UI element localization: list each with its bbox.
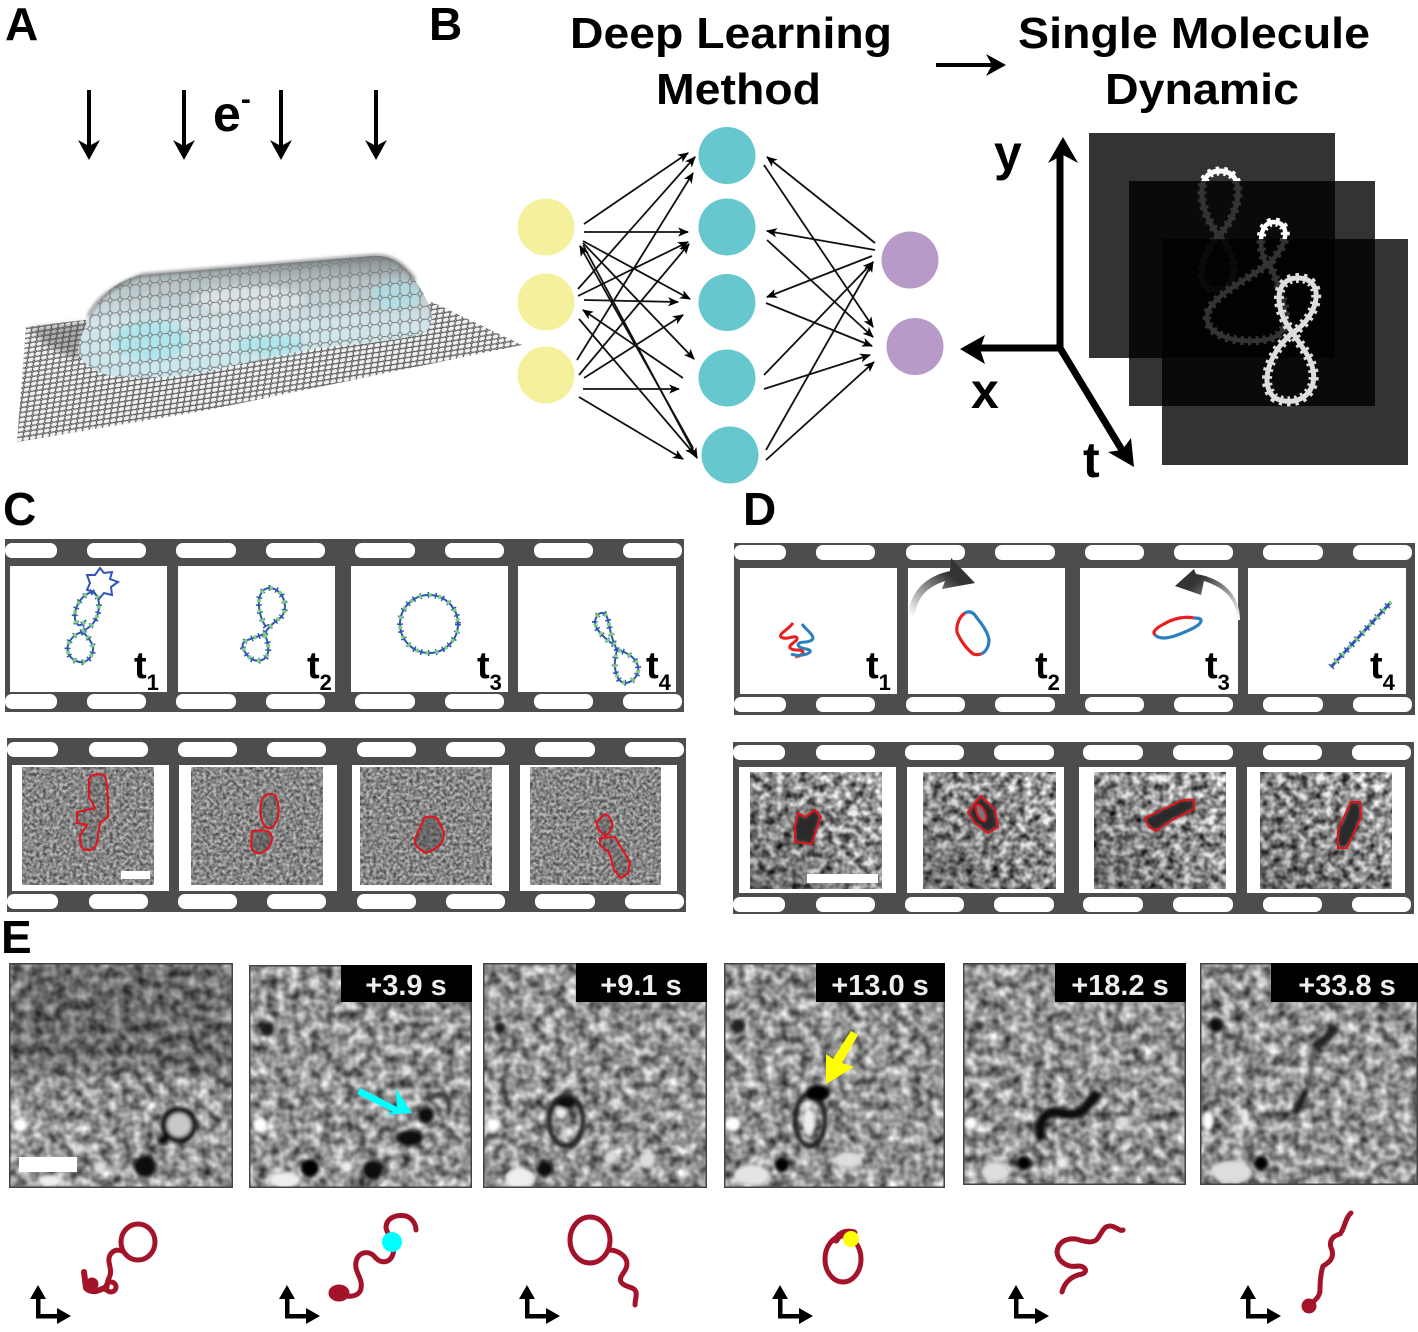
micrograph D t1 [750,772,882,889]
time tag +33.8 s: +33.8 s [1298,970,1396,1002]
panel C: schematic film strip [5,539,684,712]
heading: Deep Learning Method: Deep Learning [570,9,892,58]
panel E: micrograph frame 5 [963,963,1186,1185]
panel A: graphene sheet [17,302,522,442]
micrograph C t1 [22,767,154,885]
neural network input nodes [518,198,574,404]
time labels C: t [646,645,659,687]
time tag +13.0 s: +13.0 s [831,970,929,1002]
micrograph D t4 [1260,772,1392,889]
opened capsule D t2 [957,612,989,655]
axis label y: y [994,125,1022,181]
flattened capsule D t3 [1154,617,1201,638]
neural network connection arrows [577,153,875,460]
traced molecule 3 [570,1217,636,1305]
time labels C [134,645,672,695]
panel E: micrograph frame 3 [483,963,707,1188]
micrograph C t3 [360,767,492,885]
micrograph C t4 [530,767,661,885]
molecule frame C t3 [400,595,458,653]
time labels D: 1 [879,670,891,695]
micrograph D t3 [1094,772,1226,889]
panel E: micrograph frame 2 [249,963,472,1188]
panel A: electron beam arrows [78,90,387,160]
stacked time frames with figure-eight molecules [1089,133,1408,465]
heading: Single Molecule Dynamic [1018,9,1370,114]
cyan arrow [357,1088,412,1115]
time labels C: 2 [320,670,332,695]
time labels D: t [1205,645,1218,687]
time tag +13.0 s [816,963,945,1002]
arrow between headings [936,54,1006,76]
molecule frame C t1 [68,568,118,662]
time labels D: 2 [1048,670,1060,695]
traced molecule 6 [1304,1213,1351,1311]
time labels D: 4 [1383,670,1396,695]
panel D: micrograph film strip [733,742,1414,914]
panel E: micrograph frame 4 [724,963,945,1188]
xyt coordinate axes [960,137,1134,467]
traced molecule 2 with cyan marker [331,1216,416,1299]
time tag +3.9 s [341,963,472,1002]
time labels D: t [866,645,879,687]
heading: Single Molecule Dynamic: Single Molecule [1018,9,1370,58]
panel A: liquid pocket dome [78,256,432,378]
panel C: micrograph film strip [7,738,686,912]
time tag +9.1 s [576,963,707,1002]
axis label x: x [971,363,999,419]
panel E: micrograph frame 1 [9,963,233,1188]
panel D: schematic film strip [734,543,1415,715]
molecule frame C t2 [242,588,285,661]
panel label E: E [1,911,32,963]
time labels C: 4 [659,670,672,695]
rotation arrow right [908,558,975,620]
traced molecule 5 [1057,1226,1123,1292]
neural network output nodes [882,232,944,375]
time tag +18.2 s [1055,963,1186,1002]
straight DNA D t4 [1331,602,1391,667]
traced molecule 4 with yellow marker [825,1231,861,1282]
neural network hidden nodes [698,127,758,484]
heading: Deep Learning Method [570,9,892,114]
panel label C: C [3,483,36,535]
electron label: e [213,86,241,142]
yellow arrow [826,1031,858,1084]
scale bar E [19,1157,77,1172]
heading: Deep Learning Method: Method [656,65,821,114]
panel E: micrograph frame 6 [1200,963,1418,1185]
heading: Single Molecule Dynamic: Dynamic [1105,65,1299,114]
time labels D [866,645,1396,695]
tangled strands D t1 [780,623,813,658]
time labels C: t [477,645,490,687]
time labels C: t [307,645,320,687]
small xy axes row [30,1285,1281,1324]
time labels C: 1 [147,670,159,695]
micrograph D t2 [923,772,1056,889]
electron label: - [241,83,251,116]
time labels D: 3 [1218,670,1230,695]
time tag +18.2 s: +18.2 s [1071,970,1169,1002]
micrograph C t2 [191,767,323,885]
time labels C: 3 [490,670,502,695]
traced molecule 1 [84,1224,155,1292]
axis label t: t [1083,432,1100,488]
rotation arrow left [1175,569,1240,620]
time tag +33.8 s [1271,963,1418,1002]
time tag +9.1 s: +9.1 s [600,970,682,1002]
time labels C: t [134,645,147,687]
time tag +3.9 s: +3.9 s [365,970,447,1002]
time labels D: t [1370,645,1383,687]
time labels D: t [1035,645,1048,687]
panel label D: D [743,483,776,535]
molecule frame C t4 [595,613,638,683]
